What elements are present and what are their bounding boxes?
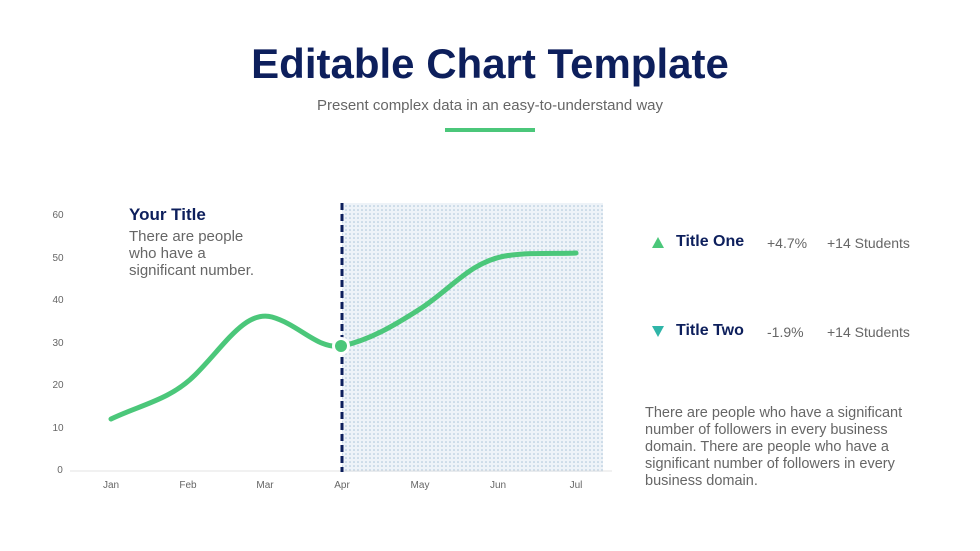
- description text: There are people who have a significant number of followers in every business domain. There are people who have a significant number of followers in every business domain.: [645, 405, 902, 489]
- stat: title two: Title Two: [676, 322, 744, 339]
- y axis labels: 10: [52, 423, 64, 434]
- y axis labels: 50: [52, 253, 64, 264]
- chart callout: There are people: [129, 228, 243, 245]
- stat: title one: Title One: [676, 233, 744, 250]
- data line: [111, 253, 576, 419]
- stat: title two: [652, 322, 910, 340]
- y axis labels: 0: [57, 465, 63, 476]
- x axis labels: May: [411, 480, 429, 491]
- accent underline: [445, 128, 535, 132]
- stat: title one: +4.7%: [767, 235, 807, 251]
- line chart: [52, 203, 612, 491]
- x axis labels: Jul: [570, 480, 582, 491]
- stat: title two: +14 Students: [827, 324, 910, 340]
- x axis labels: [103, 480, 582, 491]
- y axis labels: 60: [52, 210, 64, 221]
- dashed divider: [340, 203, 344, 472]
- x axis labels: Mar: [256, 480, 274, 491]
- y axis labels: 30: [52, 338, 64, 349]
- chart callout: who have a: [129, 245, 206, 262]
- data point marker: [332, 337, 350, 355]
- subtitle: Present complex data in an easy-to-understand way: [317, 97, 663, 114]
- title: Editable Chart Template: [251, 40, 729, 87]
- y axis labels: 20: [52, 380, 64, 391]
- x axis labels: Feb: [179, 480, 197, 491]
- chart callout: [129, 205, 254, 279]
- x axis labels: Jun: [490, 480, 506, 491]
- chart callout: significant number.: [129, 262, 254, 279]
- x axis labels: Jan: [103, 480, 119, 491]
- y axis labels: 40: [52, 295, 64, 306]
- shaded forecast region: [342, 203, 603, 472]
- y axis labels: [52, 210, 64, 476]
- chart callout: Your Title: [129, 205, 206, 224]
- x axis labels: Apr: [334, 480, 350, 491]
- stat: title one: +14 Students: [827, 235, 910, 251]
- stat: title two: -1.9%: [767, 324, 804, 340]
- stat: title one: [652, 233, 910, 251]
